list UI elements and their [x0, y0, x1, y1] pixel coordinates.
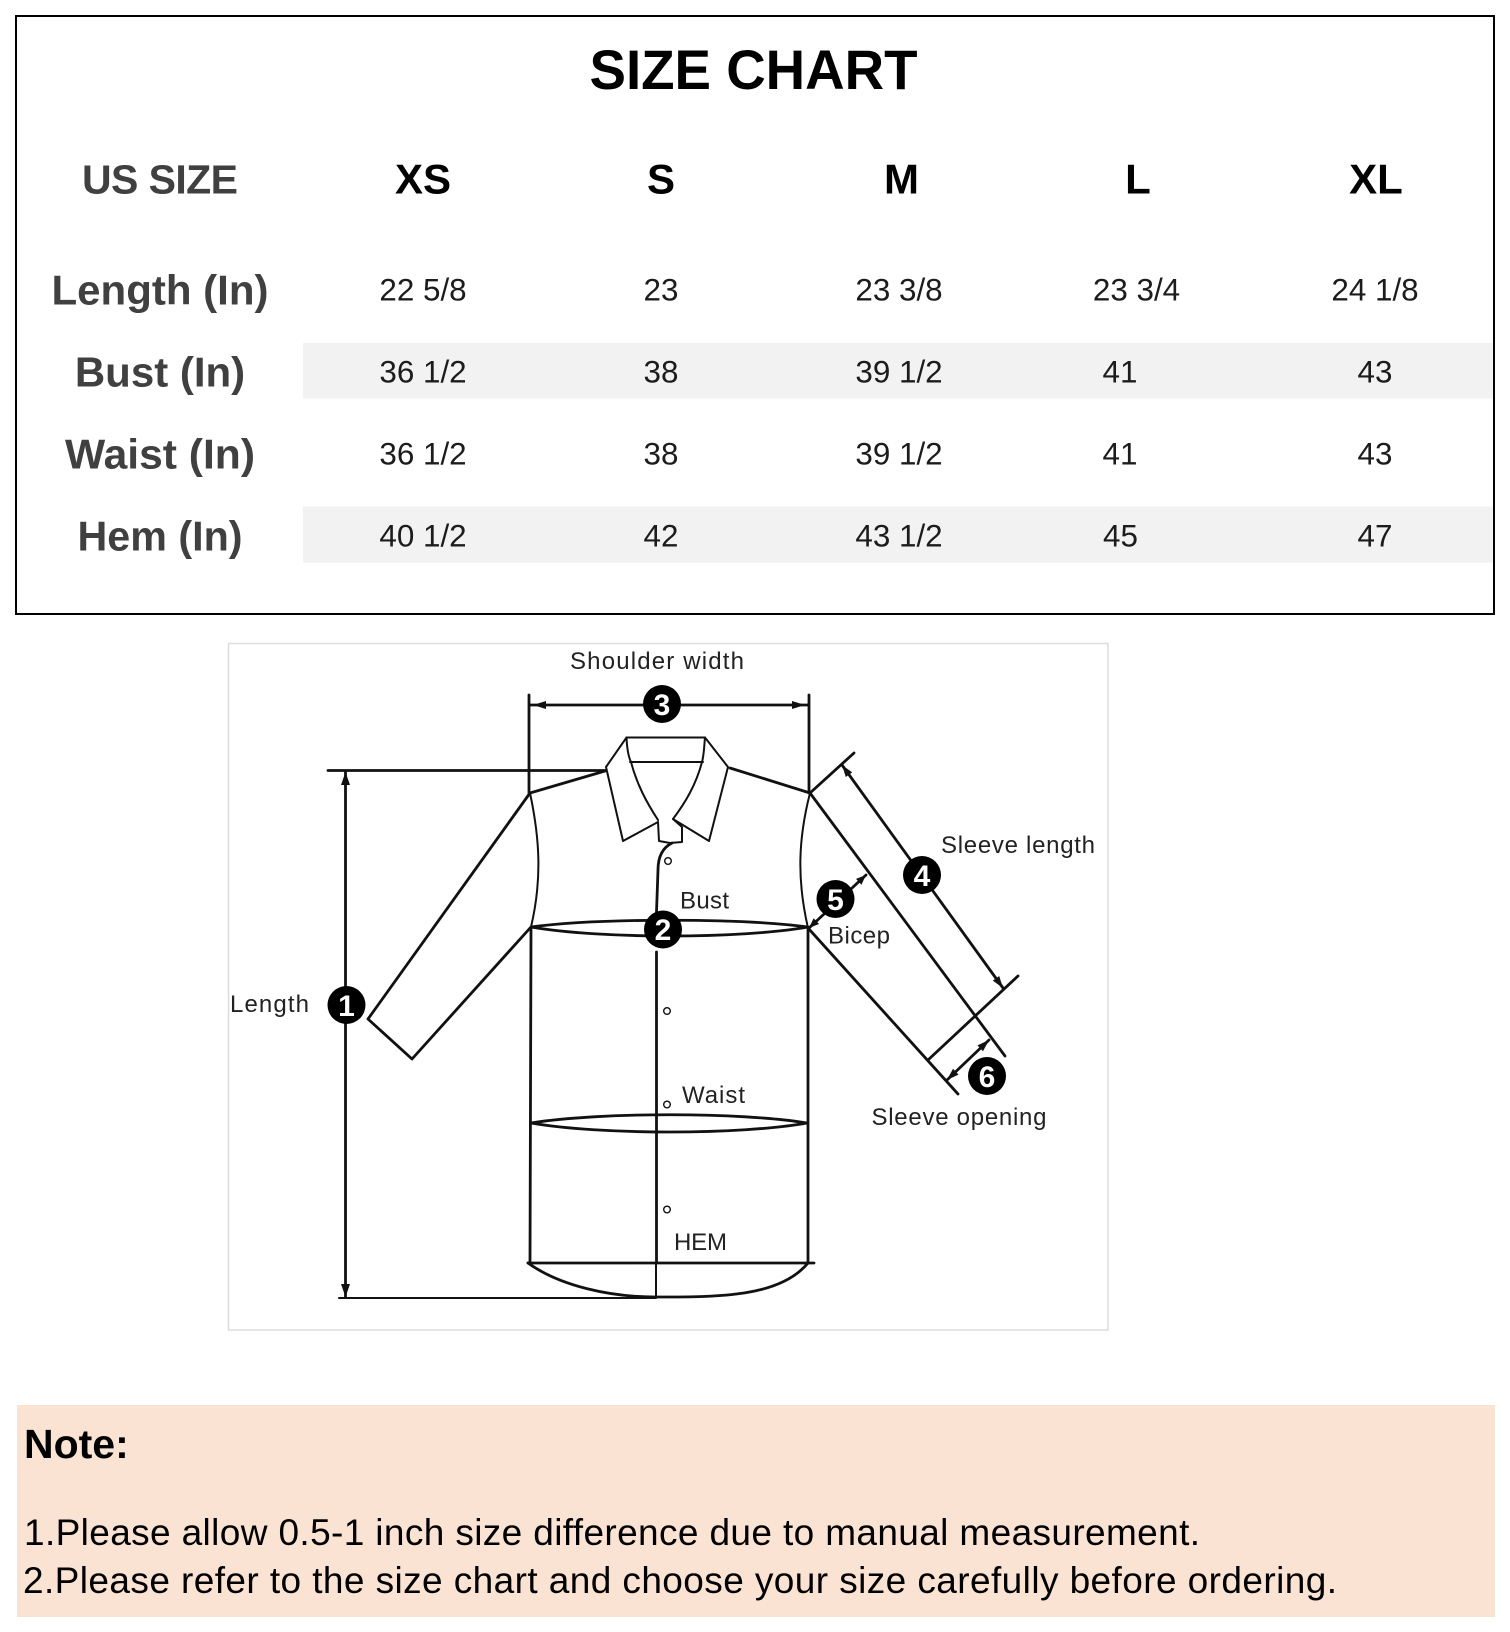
table header row: XS: [395, 156, 451, 202]
table header row: M: [884, 156, 919, 202]
shoulder width measure: Shoulder width: [570, 648, 744, 675]
row: bust: Bust (In): [75, 348, 245, 396]
row: bust: 41: [1103, 354, 1137, 390]
bust measure line: 2: [655, 914, 671, 947]
row: length: 23 3/4: [1093, 272, 1180, 308]
length measure: 1: [338, 990, 355, 1023]
sleeve opening measure: Sleeve opening: [872, 1104, 1046, 1131]
panel: note: [17, 1405, 1495, 1617]
row: hem: 40 1/2: [379, 518, 467, 554]
row: waist: 36 1/2: [379, 436, 467, 472]
table header row: US SIZE: [82, 156, 238, 202]
table header row: [82, 156, 1403, 202]
row: length: 23: [644, 272, 678, 308]
title: SIZE CHART: [590, 38, 918, 101]
shirt outline: [368, 738, 1005, 1297]
row: bust: 39 1/2: [855, 354, 943, 390]
sleeve opening measure: 6: [979, 1061, 995, 1094]
table header row: L: [1125, 156, 1151, 202]
row: waist: Waist (In): [65, 430, 255, 478]
row: waist: 43: [1358, 436, 1392, 472]
shoulder width measure: [529, 648, 809, 793]
row: length: 23 3/8: [855, 272, 943, 308]
panel: size chart table: [16, 16, 1494, 614]
row: waist: 38: [644, 436, 678, 472]
bust measure line: Bust: [680, 888, 729, 914]
table header row: S: [647, 156, 675, 202]
hem label: HEM: [674, 1229, 727, 1256]
row: bust: 38: [644, 354, 678, 390]
row: hem: 47: [1358, 518, 1392, 554]
note heading: Note:: [24, 1421, 129, 1467]
row: length: 22 5/8: [379, 272, 467, 308]
panel: shirt measurement diagram: [228, 644, 1108, 1330]
sleeve length measure: Sleeve length: [941, 832, 1095, 859]
row: length: 24 1/8: [1331, 272, 1419, 308]
bicep measure: Bicep: [828, 922, 890, 950]
length measure: [230, 770, 656, 1298]
row: length: Length (In): [52, 266, 268, 314]
row: hem: 45: [1103, 518, 1138, 554]
row: waist: 41: [1103, 436, 1137, 472]
row: bust: 43: [1358, 354, 1392, 390]
bust measure line: [531, 888, 808, 948]
waist measure line: Waist: [682, 1082, 745, 1109]
shoulder width measure: 3: [654, 689, 670, 722]
row: bust: [75, 348, 1392, 396]
table header row: XL: [1349, 156, 1403, 202]
sleeve opening measure: [872, 1040, 1046, 1131]
bicep measure: 5: [827, 884, 844, 917]
length measure: Length: [230, 991, 309, 1018]
note line 2: 2.Please refer to the size chart and choose your size carefully before ordering.: [23, 1560, 1337, 1601]
row: hem: 42: [644, 518, 678, 554]
bicep measure: [809, 875, 890, 950]
row: hem: 43 1/2: [855, 518, 943, 554]
row: bust: 36 1/2: [379, 354, 467, 390]
row: waist: 39 1/2: [855, 436, 943, 472]
row: waist: [65, 430, 1392, 478]
sleeve length measure: [810, 753, 1095, 1060]
row: length: [52, 266, 1419, 314]
note line 1: 1.Please allow 0.5-1 inch size difference due to manual measurement.: [24, 1512, 1200, 1553]
row: hem: [78, 512, 1392, 560]
waist measure line: [531, 1082, 807, 1132]
sleeve length measure: 4: [914, 860, 931, 893]
row: hem: Hem (In): [78, 512, 242, 560]
